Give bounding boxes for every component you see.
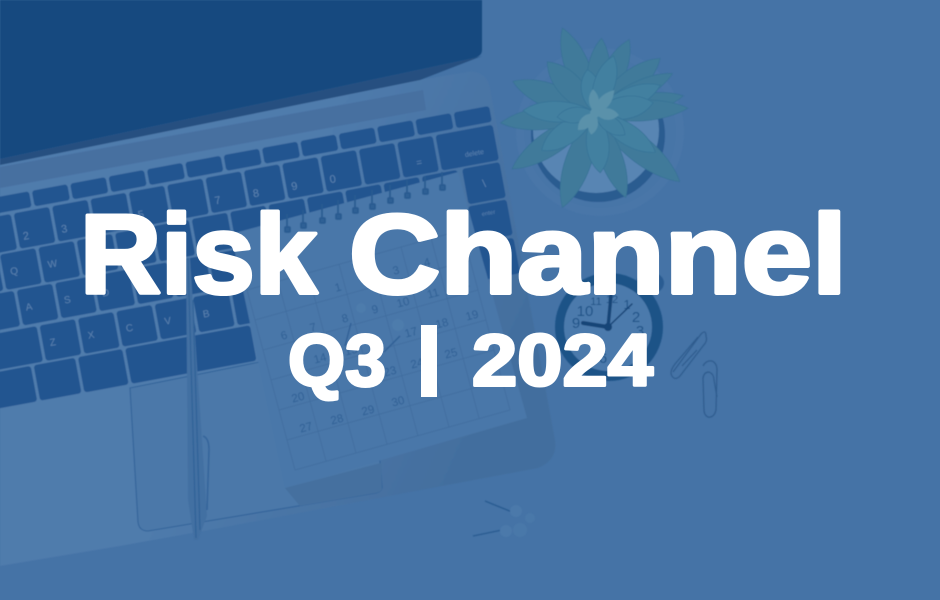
- clock bell: [636, 272, 664, 294]
- key labels: C: [125, 323, 134, 335]
- calendar dates: 6: [280, 329, 289, 343]
- calendar dates: 29: [360, 404, 376, 419]
- key labels: enter: [481, 210, 496, 218]
- calendar dates: 11: [426, 287, 441, 301]
- title: [80, 192, 847, 317]
- calendar dates: 7: [309, 321, 318, 335]
- laptop body: [0, 72, 555, 566]
- subtitle: 2024: [472, 320, 653, 402]
- calendar dates: 30: [390, 395, 406, 410]
- paper clips: [671, 332, 717, 417]
- calendar dates: 28: [329, 413, 345, 428]
- calendar dates: 15: [343, 344, 359, 359]
- push pins on calendar: [345, 303, 404, 352]
- calendar dates: 14: [312, 351, 329, 367]
- key labels: 0: [329, 173, 337, 186]
- middle leaves: [523, 53, 664, 174]
- key labels: [3, 146, 505, 354]
- clock numerals: [572, 294, 644, 367]
- key labels: \: [482, 178, 488, 190]
- calendar dates: 10: [395, 296, 411, 311]
- key labels: B: [202, 308, 211, 321]
- key labels: X: [87, 330, 96, 342]
- clock numerals: 2: [632, 309, 640, 326]
- clock numerals: 10: [577, 303, 593, 320]
- clock numerals: 12: [606, 294, 618, 306]
- laptop: [0, 0, 555, 566]
- shadow under calendar: [285, 463, 382, 506]
- calendar page: [231, 172, 527, 488]
- calendar dates: 12: [455, 278, 471, 293]
- calendar dates: 23: [382, 365, 398, 380]
- subtitle: Q3: [288, 320, 386, 402]
- key labels: Q: [9, 266, 19, 278]
- calendar dates: [280, 256, 480, 436]
- calendar spiral binding: [285, 172, 445, 232]
- calendar dates: 19: [464, 309, 480, 324]
- title: Risk: [80, 192, 318, 317]
- clock numerals: 11: [590, 296, 602, 308]
- title: Channel: [349, 192, 847, 317]
- alarm clock: [555, 272, 664, 381]
- key labels: 7: [214, 195, 222, 207]
- clock hands: [583, 296, 632, 330]
- calendar dates: 18: [434, 317, 450, 332]
- clock numerals: 9: [572, 315, 580, 332]
- key labels: D: [101, 287, 110, 300]
- key labels: W: [47, 258, 59, 271]
- key labels: 3: [60, 223, 68, 236]
- key labels: Z: [49, 337, 57, 349]
- key labels: S: [63, 295, 72, 307]
- calendar dates: 4: [423, 256, 432, 270]
- trackpad: [130, 340, 382, 531]
- laptop screen: [0, 0, 482, 159]
- key labels: A: [25, 302, 34, 314]
- key labels: 2: [22, 230, 30, 243]
- key labels: 9: [290, 180, 299, 193]
- background photo: desk scene: [0, 0, 717, 566]
- calendar grid: [247, 230, 510, 470]
- calendar dates: 1: [334, 281, 343, 295]
- clock numerals: 1: [623, 297, 631, 312]
- clock numerals: 3: [636, 323, 644, 340]
- soil and pebbles: [531, 68, 665, 202]
- calendar dates: 8: [341, 312, 350, 326]
- clock numerals: 6: [599, 350, 607, 367]
- key labels: delete: [464, 149, 485, 159]
- speaker grille: [0, 90, 426, 188]
- calendar dates: 20: [290, 391, 306, 406]
- outer leaves: [499, 24, 688, 212]
- subtitle: [288, 320, 653, 402]
- key labels: 5: [137, 209, 145, 222]
- pot: [516, 48, 684, 216]
- calendar dates: 9: [371, 303, 380, 317]
- succulent plant in pot: [499, 24, 688, 216]
- clock face: [564, 283, 652, 371]
- key labels: =: [415, 157, 423, 169]
- key labels: V: [164, 316, 173, 328]
- pen clip: [203, 436, 209, 510]
- calendar dates: 3: [392, 264, 401, 278]
- push pins on desk: [473, 501, 535, 537]
- key labels: 8: [252, 187, 260, 200]
- keyboard keys: [0, 106, 527, 417]
- pen: [186, 258, 209, 540]
- clock case: [555, 273, 663, 381]
- desk calendar: [231, 172, 527, 488]
- calendar dates: 17: [403, 326, 419, 341]
- centre leaves: [574, 86, 619, 136]
- calendar dates: 27: [298, 421, 314, 436]
- calendar dates: 24: [409, 356, 426, 372]
- calendar dates: 25: [443, 347, 459, 362]
